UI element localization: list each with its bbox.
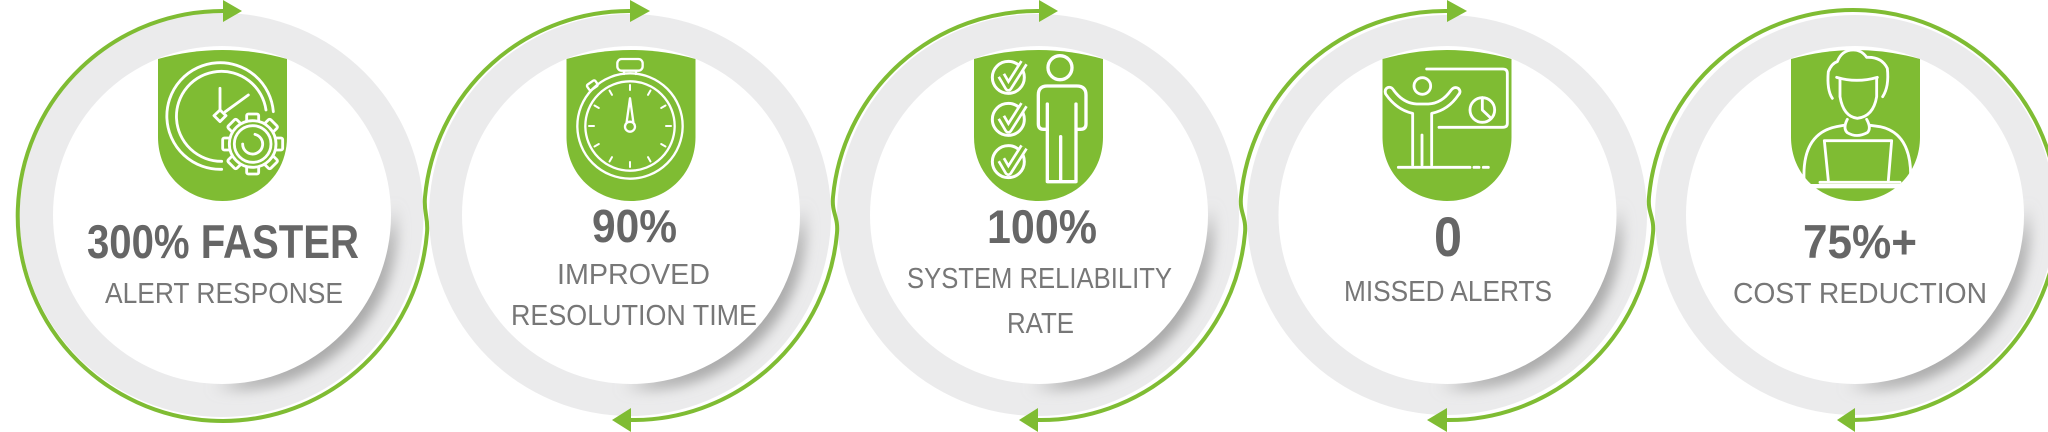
stat label: ALERT RESPONSE [105, 278, 343, 310]
stat label: MISSED ALERTS [1344, 276, 1552, 308]
badge shield [1791, 50, 1920, 201]
stat value: 0 [1434, 205, 1462, 268]
stat value: 300% FASTER [87, 215, 359, 268]
ring and disc [20, 13, 424, 417]
badge shield [566, 50, 696, 201]
badge shield [1382, 50, 1512, 201]
icon: checklist and person [992, 56, 1086, 182]
stat label line 2: RESOLUTION TIME [511, 300, 757, 332]
icon: stopwatch [577, 59, 683, 179]
stat label line 1: IMPROVED [557, 259, 710, 291]
stat value: 100% [987, 200, 1097, 253]
ring and disc [1247, 15, 1647, 415]
arrow: green line from first circle to second circle [18, 0, 650, 421]
stat value: 75%+ [1803, 215, 1917, 268]
badge shield [158, 50, 287, 201]
panel: cost reduction [1655, 15, 2048, 415]
stat value: 90% [592, 200, 677, 252]
icon: person with laptop [1803, 50, 1914, 188]
panel: system reliability [837, 14, 1239, 416]
panel: resolution time [429, 14, 831, 416]
arrow: green line from second circle to third circle [612, 0, 1058, 432]
icon: clock with gear [167, 63, 283, 174]
ring and disc [837, 14, 1239, 416]
icon: presenter at board [1385, 69, 1507, 167]
stat label: COST REDUCTION [1733, 278, 1987, 310]
ring and disc [1655, 15, 2048, 415]
panel: missed alerts [1247, 15, 1647, 415]
badge shield [974, 50, 1103, 201]
arrow: green line from third circle to fourth circle [1019, 0, 1467, 432]
arrow: green line from fourth circle around fifth circle [1427, 10, 2048, 432]
stat label line 2: RATE [1007, 308, 1074, 340]
stat label line 1: SYSTEM RELIABILITY [907, 263, 1172, 295]
panel: alert response [20, 13, 424, 417]
ring and disc [429, 14, 831, 416]
